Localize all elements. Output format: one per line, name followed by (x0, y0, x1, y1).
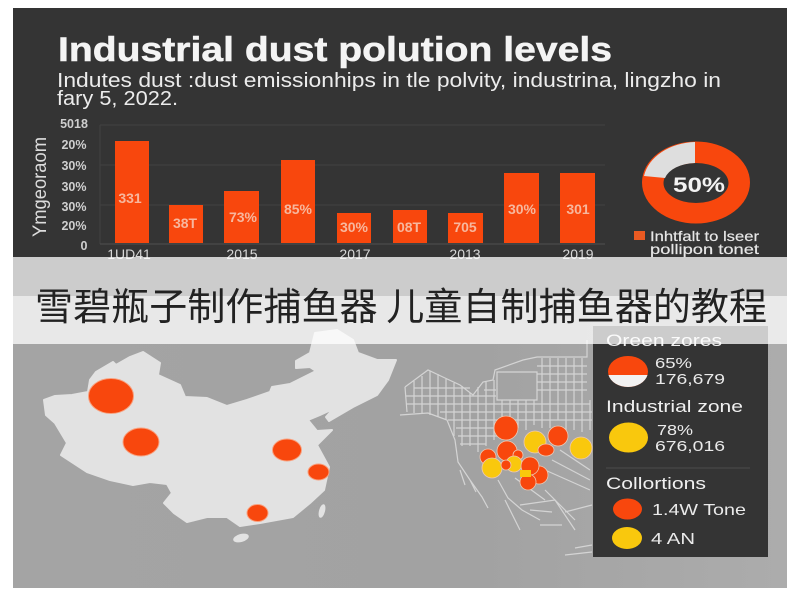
green zones values: 176,679 (655, 371, 725, 388)
bar value labels: 08T (397, 219, 422, 235)
bar value labels (118, 190, 590, 235)
subtitle: Indutes dust :dust emissionhips in tle polvity, industrina, lingzho in (57, 70, 721, 92)
legend heading: industrial zone: Industrial zone (606, 397, 743, 416)
x axis labels: 2017 (339, 246, 371, 262)
donut legend: Inhtfalt to lseer (650, 228, 759, 244)
industrial zone values (655, 422, 725, 455)
y axis labels: 30% (61, 180, 87, 194)
map: city street detail with pollution circles (400, 340, 592, 555)
y axis labels: 20% (61, 138, 87, 152)
x axis labels (107, 246, 594, 262)
y axis labels: 30% (61, 200, 87, 214)
subtitle (57, 70, 721, 110)
Hainan island (233, 534, 249, 542)
bar value labels: 85% (284, 201, 313, 217)
grid lines and axis (100, 125, 605, 244)
map: China outline with pollution circles (44, 330, 396, 544)
industrial zone values: 676,016 (655, 438, 725, 455)
bar value labels: 301 (566, 201, 590, 217)
Taiwan island (318, 504, 326, 518)
pollution circles (88, 378, 329, 522)
bar value labels: 30% (340, 219, 369, 235)
icon: red and white circle (608, 356, 648, 387)
icon: red collection dot (613, 498, 642, 520)
bar value labels: 73% (229, 209, 258, 225)
bar value labels: 331 (118, 190, 142, 206)
donut chart: 50% (642, 142, 750, 224)
green zones values: 65% (655, 355, 692, 372)
icon: yellow collection dot (612, 527, 642, 549)
China landmass (44, 330, 396, 526)
green zones values (655, 355, 725, 388)
panel: map legend (593, 326, 768, 557)
donut value: 50% (673, 174, 725, 197)
bar value labels: 30% (508, 201, 537, 217)
bar value labels: 705 (453, 219, 477, 235)
street network (400, 340, 592, 555)
legend heading: green zones: Oreen zores (606, 331, 722, 350)
y axis title: Ymgeoraom (30, 137, 51, 237)
x axis labels: 2015 (226, 246, 258, 262)
banner headline text: 雪碧瓶子制作捕鱼器 儿童自制捕鱼器的教程 (35, 276, 767, 331)
panel: dust levels chart background (13, 8, 787, 296)
x axis labels: 2013 (449, 246, 481, 262)
red collection value: 1.4W Tone (652, 502, 746, 519)
x axis labels: 1UD41 (107, 246, 151, 262)
y axis labels (60, 117, 88, 253)
x axis labels: 2019 (562, 246, 594, 262)
bars (115, 141, 595, 243)
legend heading: collections: Collortions (606, 474, 706, 493)
icon: yellow circle (609, 422, 648, 452)
industrial zone values: 78% (657, 422, 693, 439)
y axis labels: 0 (81, 239, 88, 253)
title: Industrial dust polution levels (58, 31, 612, 69)
y axis labels: 20% (61, 219, 87, 233)
donut legend: pollipon tonet (650, 241, 759, 257)
yellow collection value: 4 AN (651, 531, 695, 548)
bar value labels: 38T (173, 215, 198, 231)
subtitle: fary 5, 2022. (57, 88, 178, 110)
panel: map background (13, 296, 787, 588)
bar chart: yearly dust levels (30, 117, 605, 262)
y axis labels: 30% (61, 159, 87, 173)
donut legend (634, 228, 759, 257)
y axis labels: 5018 (60, 117, 88, 131)
red and yellow zone circles (480, 416, 592, 490)
headline banner (13, 257, 787, 344)
